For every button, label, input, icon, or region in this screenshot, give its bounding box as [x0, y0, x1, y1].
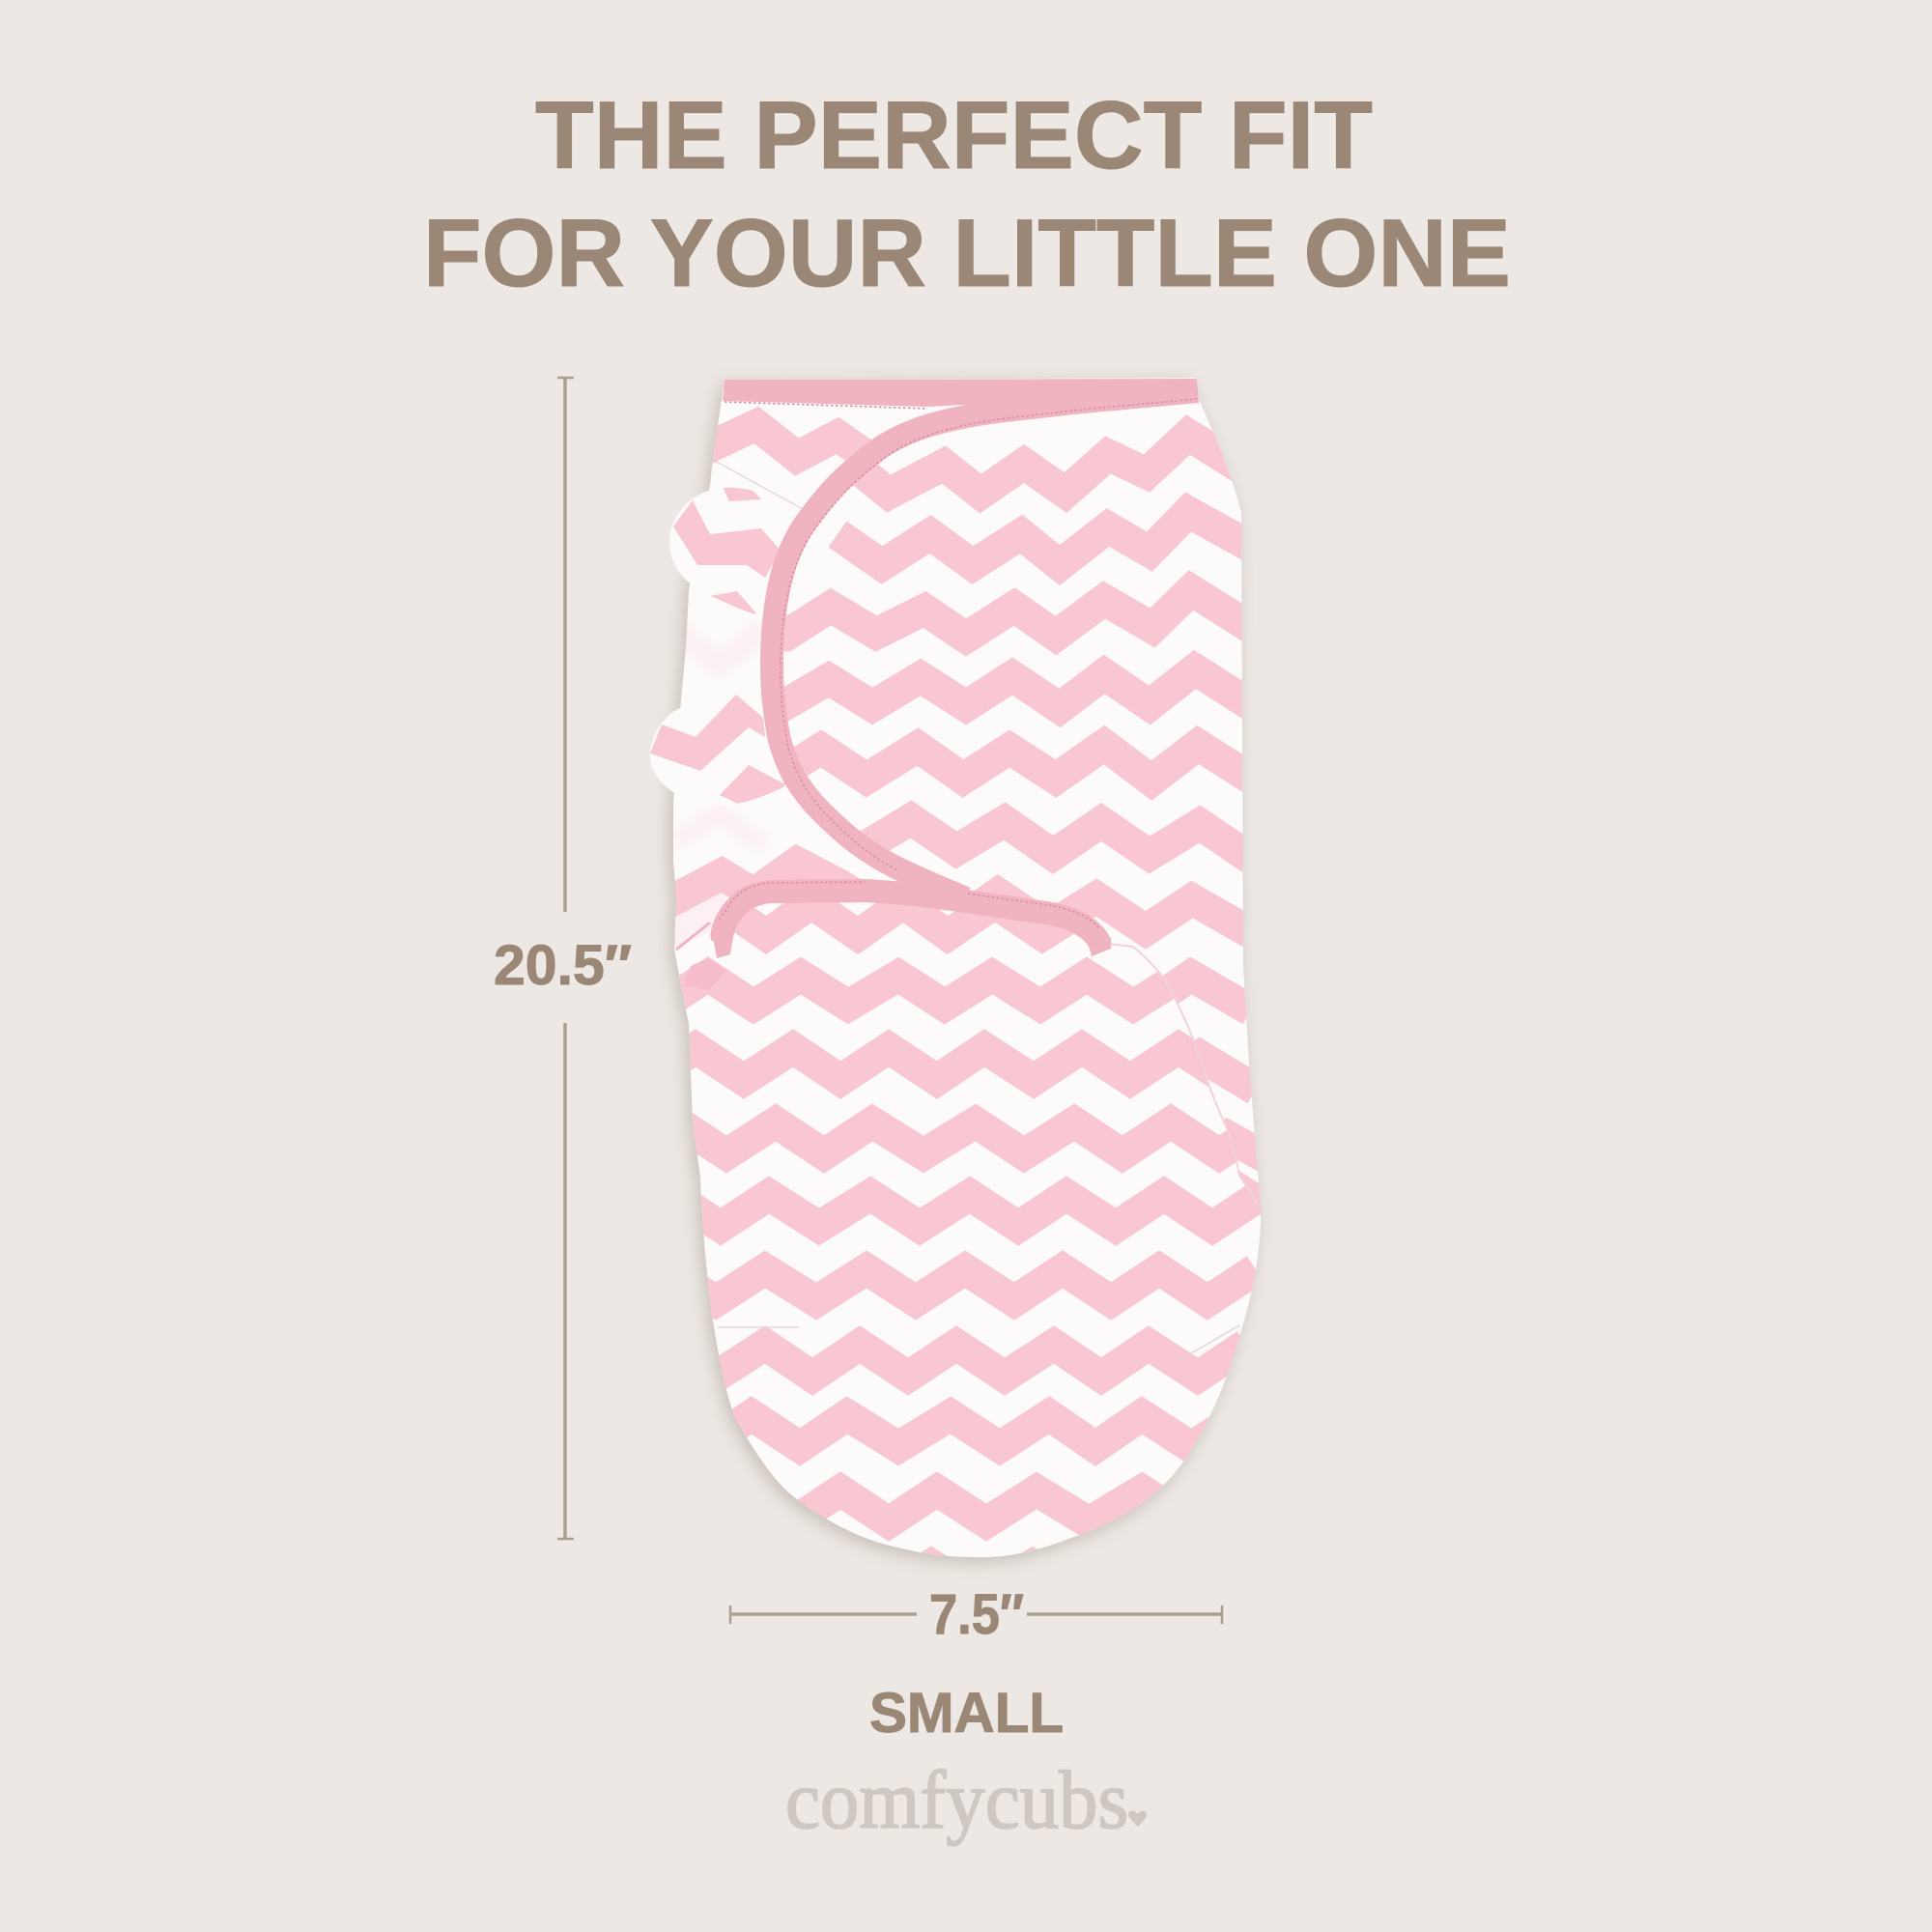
- height label: 20.5″: [494, 934, 632, 997]
- title: FOR YOUR LITTLE ONE: [423, 199, 1511, 306]
- back layer of garment: [673, 378, 1196, 1557]
- garment shadow: [669, 383, 1257, 1562]
- width label: 7.5″: [929, 1583, 1024, 1646]
- size label: SMALL: [869, 1682, 1064, 1745]
- swaddle garment: [650, 375, 1264, 1569]
- elastic gathers: [676, 923, 1111, 990]
- strap tab lower: [650, 695, 785, 804]
- flap trim: [772, 391, 1198, 898]
- height dimension line: [557, 378, 574, 1539]
- width dimension line: [730, 1605, 1222, 1624]
- brand logo: comfycubs: [785, 1753, 1128, 1846]
- strap tab upper: [669, 487, 779, 614]
- front flap with chevron print: [783, 396, 1261, 1208]
- title: [423, 81, 1511, 306]
- pocket trim: [719, 882, 1099, 942]
- lower pocket with chevron print: [674, 902, 1261, 1557]
- title: THE PERFECT FIT: [535, 81, 1373, 188]
